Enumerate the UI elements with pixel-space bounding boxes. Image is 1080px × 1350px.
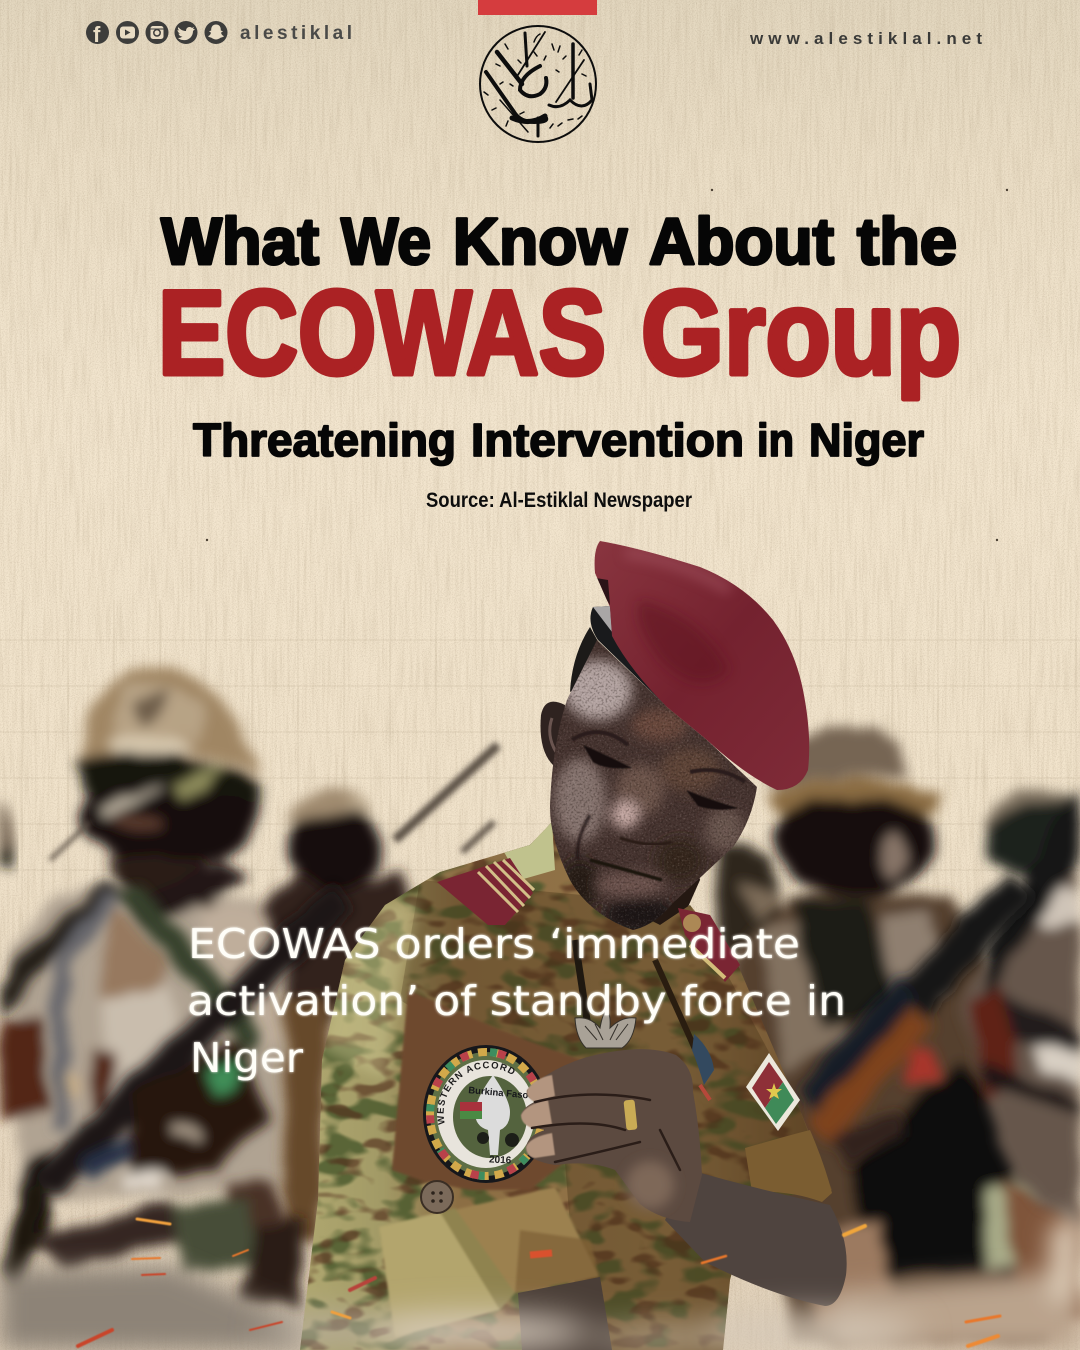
icon: instagram [146,21,168,44]
heading line 1: About [649,204,834,278]
heading line 3: Intervention [471,414,744,466]
central officer figure [300,541,847,1350]
heading line 3: Niger [809,414,924,466]
middle soldier [262,790,420,1240]
arm patch: Western Accord: WESTERN ACCORD [437,1062,515,1125]
heading line 1: What [161,204,319,278]
hand [521,1049,702,1222]
dust clouds [260,1312,920,1350]
rear figures behind officer right [715,844,790,960]
left edge helmet [0,800,14,870]
heading line 2: Group [641,266,961,400]
icon: youtube [116,21,139,44]
right soldier rifle [800,870,1035,1165]
beret band [590,606,667,707]
icon: snapchat [204,21,228,44]
far right soldier [960,787,1080,1230]
arm patch: Western Accord: 2016 [489,1154,512,1167]
social icons [86,21,228,47]
right soldier [730,725,1080,1340]
left epaulette [437,858,534,925]
icon: facebook [86,21,109,47]
overlay line 3: Niger [190,1034,303,1082]
heading line 3 [193,414,924,466]
heading line 1: the [857,204,957,278]
heading line 1 [161,204,957,278]
heading line 1: We [341,204,431,278]
heading line 1: Know [453,204,628,278]
overlay headline [187,920,846,1082]
right cuff [745,1130,832,1202]
icon: twitter [174,21,198,44]
badge: crest [692,1034,714,1100]
beret [595,541,809,790]
overlay line 2: activation’ of standby force in [187,977,846,1025]
collar [504,823,555,879]
heading line 2 [158,266,961,400]
eyes [583,745,738,810]
cuff button [421,1181,453,1213]
ear [540,702,565,770]
head [540,627,757,930]
rifle barrels [50,745,498,860]
arm patch: Western Accord [423,1045,545,1183]
forearm [665,1170,847,1306]
hair [570,627,600,692]
fingertips [521,1075,555,1158]
left soldier rifle and straps [0,880,350,1310]
logo: calligraphic roundel [480,26,596,142]
right epaulette [678,908,740,982]
finger creases [532,1094,680,1170]
uniform [296,820,836,1350]
heading line 3: Threatening [193,414,456,466]
chest darkening [400,880,830,1350]
lit shoulder [322,900,420,1080]
top red tab [478,0,597,15]
forearm below cuff [518,1277,612,1350]
left soldier [0,665,285,1245]
sleeve flag of Burkina Faso [746,1053,800,1131]
blurred soldiers background [0,665,1080,1350]
lips line [590,860,662,880]
heading line 3: in [757,414,794,466]
neck [552,820,700,935]
icon: facebook: f [93,22,101,47]
bottom haze [0,1210,1080,1350]
velcro arm panel [392,990,580,1190]
social handle: alestiklal [240,23,352,44]
sleeve cuff [379,1187,599,1337]
title [158,204,961,466]
flying sparks [78,1219,1000,1346]
heading line 2: ECOWAS [158,266,606,400]
badge: eagle pin [575,1012,636,1048]
brows [572,732,745,782]
overlay line 1: ECOWAS orders ‘immediate [188,920,800,968]
source line: Source: Al-Estiklal Newspaper [426,489,692,512]
seams [575,940,590,1040]
face [550,640,757,930]
arm patch: Western Accord: Burkina Faso [468,1085,529,1101]
website url: www.alestiklal.net [749,29,982,48]
